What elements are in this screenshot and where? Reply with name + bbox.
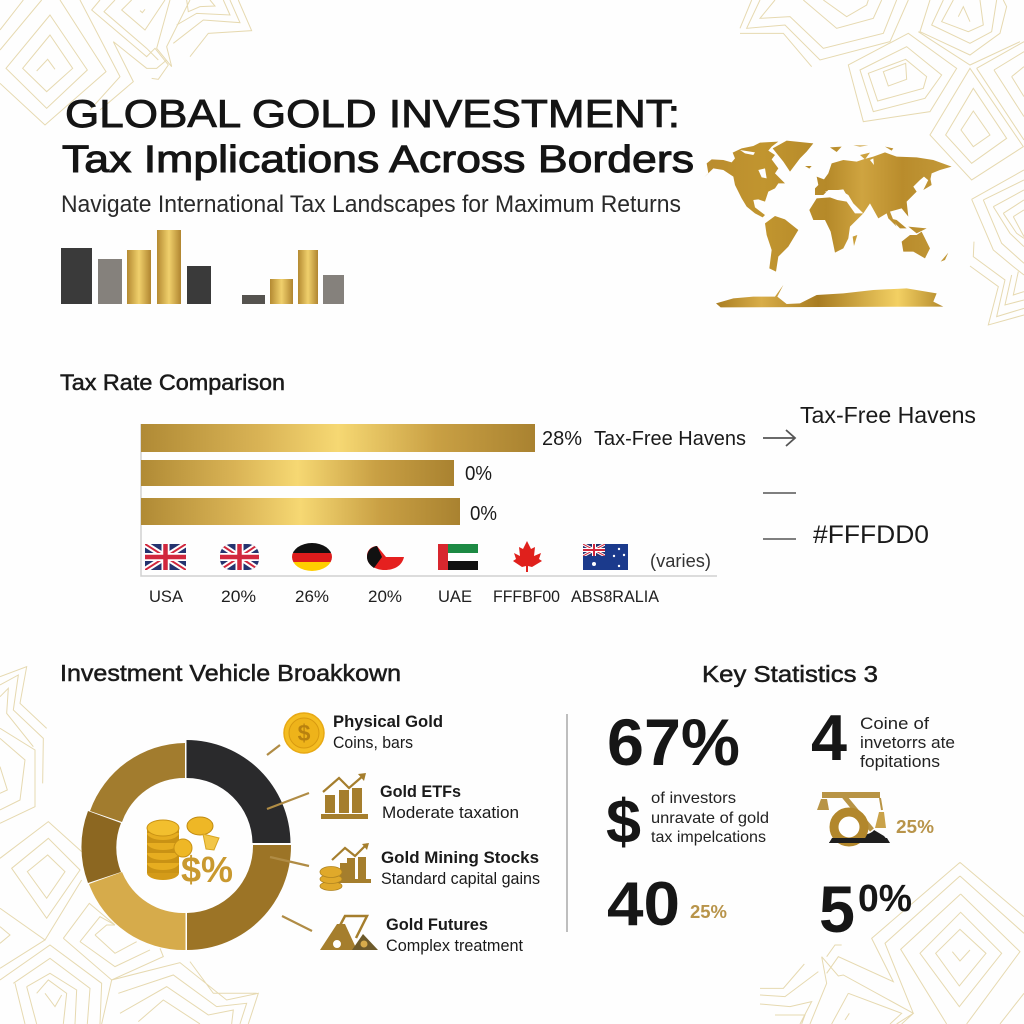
- background pattern: top left: [0, 0, 252, 125]
- label: physical gold: [333, 712, 443, 752]
- donut chart: [81, 740, 291, 950]
- world map: [704, 141, 952, 307]
- background pattern: bottom left: [0, 667, 258, 1024]
- icon: Canadian maple leaf: [513, 541, 542, 572]
- icon: Czech flag: [367, 546, 404, 570]
- stat text: investors unaware: unravate of gold: [651, 810, 769, 827]
- callout: tax-free havens: Tax-Free Havens: [800, 402, 976, 428]
- icon: coins in donut centre: $%: [181, 849, 233, 890]
- stat: 40: 40: [607, 870, 680, 939]
- stat text: investors unaware: [651, 790, 769, 846]
- bar value labels: 0%: [465, 463, 492, 485]
- country labels: UAE: [438, 587, 472, 606]
- leader lines: [267, 745, 312, 931]
- stat: 50%: 0%: [858, 878, 912, 920]
- stat: dollar sign: $: [606, 788, 641, 857]
- stat: 4: 4: [811, 701, 847, 774]
- stat text: coine of investors: invetorrs ate: [860, 733, 955, 752]
- stat text: coine of investors: fopitations: [860, 752, 940, 771]
- label: gold mining stocks: [381, 848, 540, 888]
- icon: Australian flag: [583, 544, 628, 570]
- title: Tax Implications Across Borders: [62, 139, 694, 181]
- label: gold mining stocks: Gold Mining Stocks: [381, 848, 539, 867]
- bar value labels: Tax-Free Havens: [594, 428, 746, 450]
- icon: coin: $: [298, 720, 311, 746]
- country labels: 26%: [295, 587, 329, 606]
- chart axis: [141, 424, 717, 576]
- stat: 50%: 5: [819, 872, 855, 946]
- section heading: key statistics: Key Statistics 3: [702, 661, 878, 687]
- icon: mining stocks: [320, 843, 371, 890]
- country labels: [149, 587, 660, 606]
- column divider: [566, 714, 568, 932]
- icon: ETF chart: [321, 773, 368, 819]
- bar value labels: 0%: [470, 503, 497, 525]
- country labels: ABS8RALIA: [571, 587, 660, 606]
- label: gold ETFs: Moderate taxation: [382, 803, 519, 822]
- callout: tax-free havens: [763, 402, 976, 549]
- stat: 25% with excavator: 25%: [896, 817, 934, 837]
- section heading: investment vehicle: Investment Vehicle Broakkown: [60, 660, 401, 686]
- country labels: 20%: [368, 587, 402, 606]
- icon: UK flag rounded: [220, 544, 259, 570]
- country labels: USA: [149, 587, 184, 606]
- bar value labels: [465, 428, 746, 525]
- title: GLOBAL GOLD INVESTMENT:: [65, 93, 680, 136]
- icon: UK flag: [145, 544, 186, 570]
- bar value labels: 28%: [542, 428, 582, 450]
- label: gold mining stocks: Standard capital gains: [381, 869, 540, 888]
- stat: 67%: 67%: [607, 705, 740, 779]
- stat: 25% small: 25%: [690, 902, 727, 922]
- label: physical gold: Physical Gold: [333, 712, 443, 731]
- background pattern: top right: [740, 0, 1024, 325]
- icon: coin: [284, 713, 324, 753]
- stat text: coine of investors: [860, 714, 955, 771]
- background pattern: bottom right: [760, 862, 1024, 1024]
- stat text: investors unaware: tax impelcations: [651, 829, 766, 846]
- icon: excavator: [817, 792, 890, 843]
- icon: futures: [320, 916, 378, 950]
- icon: UAE flag: [438, 544, 478, 570]
- flag note: (varies): [650, 551, 711, 571]
- country labels: 20%: [221, 587, 256, 606]
- stat text: investors unaware: of investors: [651, 790, 736, 807]
- title: [62, 93, 694, 181]
- subtitle: Navigate International Tax Landscapes for Maximum Returns: [61, 191, 681, 218]
- arrow: [763, 430, 795, 446]
- section heading: tax rate comparison: Tax Rate Comparison: [60, 370, 285, 395]
- decorative header bar charts: [61, 230, 344, 304]
- label: gold ETFs: Gold ETFs: [380, 782, 461, 801]
- stat text: coine of investors: Coine of: [860, 714, 929, 733]
- label: gold futures: Gold Futures: [386, 915, 488, 934]
- label: physical gold: Coins, bars: [333, 733, 413, 752]
- label: gold futures: [386, 915, 523, 955]
- label: gold futures: Complex treatment: [386, 936, 523, 955]
- stat: 50%: [819, 872, 912, 946]
- icon: coins in donut centre: [147, 817, 233, 890]
- callout: tax-free havens: #FFFDD0: [813, 521, 929, 549]
- icon: German flag: [292, 543, 332, 571]
- label: gold ETFs: [380, 782, 519, 822]
- country labels: FFFBF00: [493, 587, 560, 606]
- bar chart: tax rate bars: [141, 424, 535, 525]
